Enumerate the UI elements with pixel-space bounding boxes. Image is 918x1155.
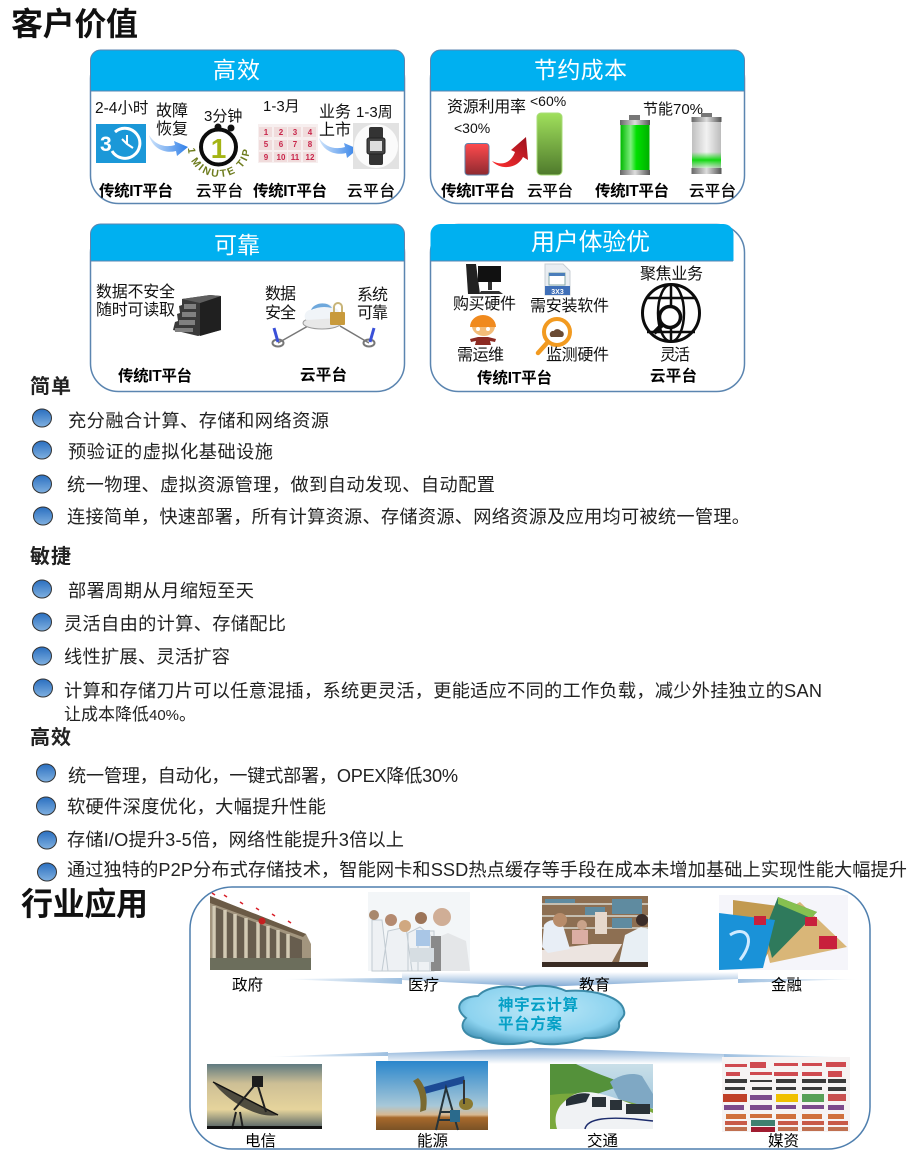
label: 购买硬件: 购买硬件 bbox=[453, 295, 516, 313]
label: 故障恢复: 故障 bbox=[156, 102, 188, 120]
panel: 用户体验优 bbox=[430, 224, 744, 392]
panel header: 用户体验优: 用户体验优 bbox=[531, 229, 650, 256]
title: 客户价值: 客户价值 bbox=[11, 6, 138, 42]
icon: calendar: 7 bbox=[293, 140, 298, 149]
panel: industry applications bbox=[190, 887, 870, 1150]
label: 系统可靠: 系统 bbox=[357, 286, 388, 304]
bar: green 60% bbox=[537, 113, 562, 175]
heading: 简单: 简单 bbox=[30, 375, 71, 398]
icon: calendar: 1 bbox=[264, 128, 269, 137]
platform labels: 传统IT平台 bbox=[253, 181, 327, 200]
label: 需安装软件: 需安装软件 bbox=[530, 297, 609, 315]
bullet list: 简单: 统一物理、虚拟资源管理，做到自动发现、自动配置 bbox=[67, 475, 495, 495]
platform labels: 传统IT平台 bbox=[477, 368, 552, 387]
icon: calendar: 9 bbox=[264, 153, 269, 162]
icon: installer file bbox=[545, 264, 570, 296]
platform labels bbox=[118, 365, 347, 385]
platform labels: 云平台 bbox=[300, 365, 347, 384]
icon: orange magnifier bbox=[538, 319, 570, 353]
section: 敏捷 bbox=[30, 544, 822, 724]
label: 业务上市: 上市 bbox=[319, 121, 351, 139]
icon: desktop computer bbox=[466, 264, 503, 294]
label: 故障恢复 bbox=[156, 102, 188, 138]
section: 高效 bbox=[30, 725, 907, 881]
label: 数据不安全 随时可读取: 随时可读取 bbox=[96, 301, 175, 319]
label: 政府: 政府 bbox=[232, 976, 263, 994]
bullet list: 敏捷: 让成本降低40%。 bbox=[64, 705, 196, 724]
icon: server rack bbox=[173, 295, 221, 336]
icon: low battery bbox=[692, 113, 722, 174]
platform labels bbox=[441, 181, 736, 200]
icon: calendar: 12 bbox=[306, 153, 315, 162]
label: 金融: 金融 bbox=[771, 976, 802, 994]
photo: government bbox=[210, 893, 311, 970]
panel header: 高效: 高效 bbox=[213, 57, 260, 83]
icon: blue clock: 3 bbox=[100, 133, 112, 156]
panel: 节约成本 bbox=[430, 50, 744, 204]
label: 2-4小时: 2-4小时 bbox=[95, 99, 148, 117]
label: 媒资: 媒资 bbox=[768, 1132, 799, 1150]
label: <30%: <30% bbox=[454, 120, 490, 136]
heading: 高效: 高效 bbox=[30, 725, 71, 749]
icon: calendar bbox=[258, 124, 318, 163]
bullet list: 敏捷: 计算和存储刀片可以任意混插，系统更灵活，更能适应不同的工作负载，减少外挂独立的SAN bbox=[64, 681, 822, 701]
arrow: blue curved bbox=[149, 135, 188, 156]
bullet list: 敏捷 bbox=[32, 580, 822, 724]
label: 能源: 能源 bbox=[417, 1132, 448, 1150]
bullet list: 敏捷: 灵活自由的计算、存储配比 bbox=[64, 614, 286, 634]
label: 1-3周: 1-3周 bbox=[356, 104, 393, 121]
label: 数据不安全 随时可读取: 数据不安全 bbox=[96, 283, 175, 301]
icon: calendar: 2 bbox=[279, 128, 284, 137]
label: 系统可靠 bbox=[357, 286, 388, 322]
bullet list: 高效: 软硬件深度优化，大幅提升性能 bbox=[67, 797, 326, 817]
icon: calendar: 4 bbox=[308, 128, 313, 137]
bullet list: 敏捷: 部署周期从月缩短至天 bbox=[68, 581, 254, 601]
icon: globe with magnifier bbox=[642, 284, 700, 342]
panel: 可靠 bbox=[90, 224, 404, 392]
icon: maintenance worker bbox=[470, 315, 496, 345]
platform labels: 云平台 bbox=[527, 182, 573, 200]
icon: calendar: 8 bbox=[308, 140, 313, 149]
icon: stopwatch one minute tip: 1 bbox=[211, 133, 226, 164]
bullet list: 敏捷: 线性扩展、灵活扩容 bbox=[64, 647, 230, 667]
photo: telecom dish bbox=[207, 1064, 322, 1129]
title: 行业应用: 行业应用 bbox=[21, 886, 148, 922]
bullet list: 高效: 统一管理，自动化，一键式部署，OPEX降低30% bbox=[68, 766, 458, 786]
icon: calendar: 3 bbox=[293, 128, 298, 137]
swoosh: bottom bbox=[265, 1048, 845, 1064]
bullet list: 高效: 通过独特的P2P分布式存储技术，智能网卡和SSD热点缓存等手段在成本未增加基础上实现性能大幅提升 bbox=[67, 860, 907, 880]
platform labels: 传统IT平台 bbox=[99, 181, 173, 200]
bullet list: 高效: 存储I/O提升3-5倍，网络性能提升3倍以上 bbox=[67, 830, 404, 850]
label: 医疗: 医疗 bbox=[408, 976, 439, 994]
platform labels bbox=[99, 181, 395, 200]
icon: calendar: 6 bbox=[279, 140, 284, 149]
label: <60%: <60% bbox=[530, 93, 566, 109]
icon: blue clock bbox=[96, 124, 146, 163]
bar: red 30% bbox=[465, 144, 489, 175]
panel header: 可靠: 可靠 bbox=[214, 232, 260, 258]
label: 1-3月: 1-3月 bbox=[263, 98, 300, 115]
label: 教育: 教育 bbox=[579, 976, 610, 994]
bullet list: 简单: 充分融合计算、存储和网络资源 bbox=[68, 411, 329, 431]
section: 简单 bbox=[30, 375, 750, 527]
platform labels: 传统IT平台 bbox=[118, 366, 192, 385]
label: 3分钟: 3分钟 bbox=[204, 108, 242, 125]
arrow: blue curved 2 bbox=[319, 138, 358, 158]
label: 故障恢复: 恢复 bbox=[156, 120, 188, 138]
bullet list: 高效 bbox=[36, 764, 907, 881]
icon: stopwatch one minute tip bbox=[188, 124, 249, 177]
photo: media logo wall bbox=[722, 1057, 850, 1132]
platform labels: 传统IT平台 bbox=[595, 181, 669, 200]
panel header: 节约成本: 节约成本 bbox=[534, 57, 627, 83]
label: 数据安全: 数据 bbox=[265, 285, 296, 303]
heading: 敏捷: 敏捷 bbox=[30, 544, 71, 568]
icon: calendar: 5 bbox=[264, 140, 269, 149]
swoosh: top bbox=[282, 972, 860, 987]
panel header: 用户体验优 bbox=[430, 224, 734, 261]
platform labels: 传统IT平台 bbox=[441, 181, 515, 200]
platform labels: 云平台 bbox=[650, 366, 697, 385]
label: 交通: 交通 bbox=[587, 1132, 618, 1150]
icon: installer file: 3X3 bbox=[551, 289, 564, 296]
label: 系统可靠: 可靠 bbox=[357, 304, 388, 322]
platform labels: 云平台 bbox=[689, 182, 736, 200]
icon: calendar: 10 bbox=[277, 153, 286, 162]
photo: bank cards bbox=[719, 895, 848, 970]
photo: education library bbox=[542, 896, 648, 967]
icon: smart watch bbox=[353, 123, 399, 169]
icon: stopwatch one minute tip: 1 MINUTE TIP bbox=[188, 148, 249, 177]
label: 监测硬件: 监测硬件 bbox=[546, 346, 609, 364]
label: 业务上市: 业务 bbox=[319, 103, 351, 121]
label: 数据安全: 安全 bbox=[265, 304, 296, 322]
photo: medical team bbox=[368, 892, 470, 971]
bullet list: 简单 bbox=[32, 409, 750, 527]
photo: transport train bbox=[550, 1064, 653, 1129]
platform labels: 云平台 bbox=[196, 182, 243, 200]
icon: cloud with lock and pins bbox=[272, 303, 374, 346]
label: 数据不安全 随时可读取 bbox=[96, 283, 175, 319]
cloud: 神宇云计算平台方案: 平台方案 bbox=[498, 1014, 562, 1033]
label: 资源利用率: 资源利用率 bbox=[447, 98, 526, 116]
panel header: 可靠 bbox=[90, 224, 404, 261]
icon: calendar: 11 bbox=[291, 153, 300, 162]
panel header: 节约成本 bbox=[430, 50, 744, 91]
label: 聚焦业务: 聚焦业务 bbox=[640, 265, 703, 283]
arrow: red curved bbox=[492, 137, 528, 167]
bullet list: 简单: 连接简单，快速部署，所有计算资源、存储资源、网络资源及应用均可被统一管理。 bbox=[67, 507, 750, 527]
label: 电信: 电信 bbox=[245, 1132, 276, 1150]
label: 灵活: 灵活 bbox=[660, 346, 690, 364]
platform labels bbox=[477, 366, 697, 387]
label: 节能70%: 节能70% bbox=[643, 101, 703, 118]
icon: full green battery bbox=[620, 115, 650, 175]
label: 业务上市 bbox=[319, 103, 351, 139]
label: 数据安全 bbox=[265, 285, 296, 322]
panel header: 高效 bbox=[90, 50, 404, 91]
panel: 高效 bbox=[90, 50, 406, 204]
platform labels: 云平台 bbox=[347, 182, 395, 200]
bullet list: 简单: 预验证的虚拟化基础设施 bbox=[68, 442, 273, 462]
cloud: 神宇云计算平台方案: 神宇云计算 bbox=[498, 995, 578, 1014]
photo: energy pump jack bbox=[376, 1061, 488, 1130]
label: 需运维: 需运维 bbox=[457, 346, 504, 364]
cloud: 神宇云计算平台方案 bbox=[459, 986, 624, 1044]
